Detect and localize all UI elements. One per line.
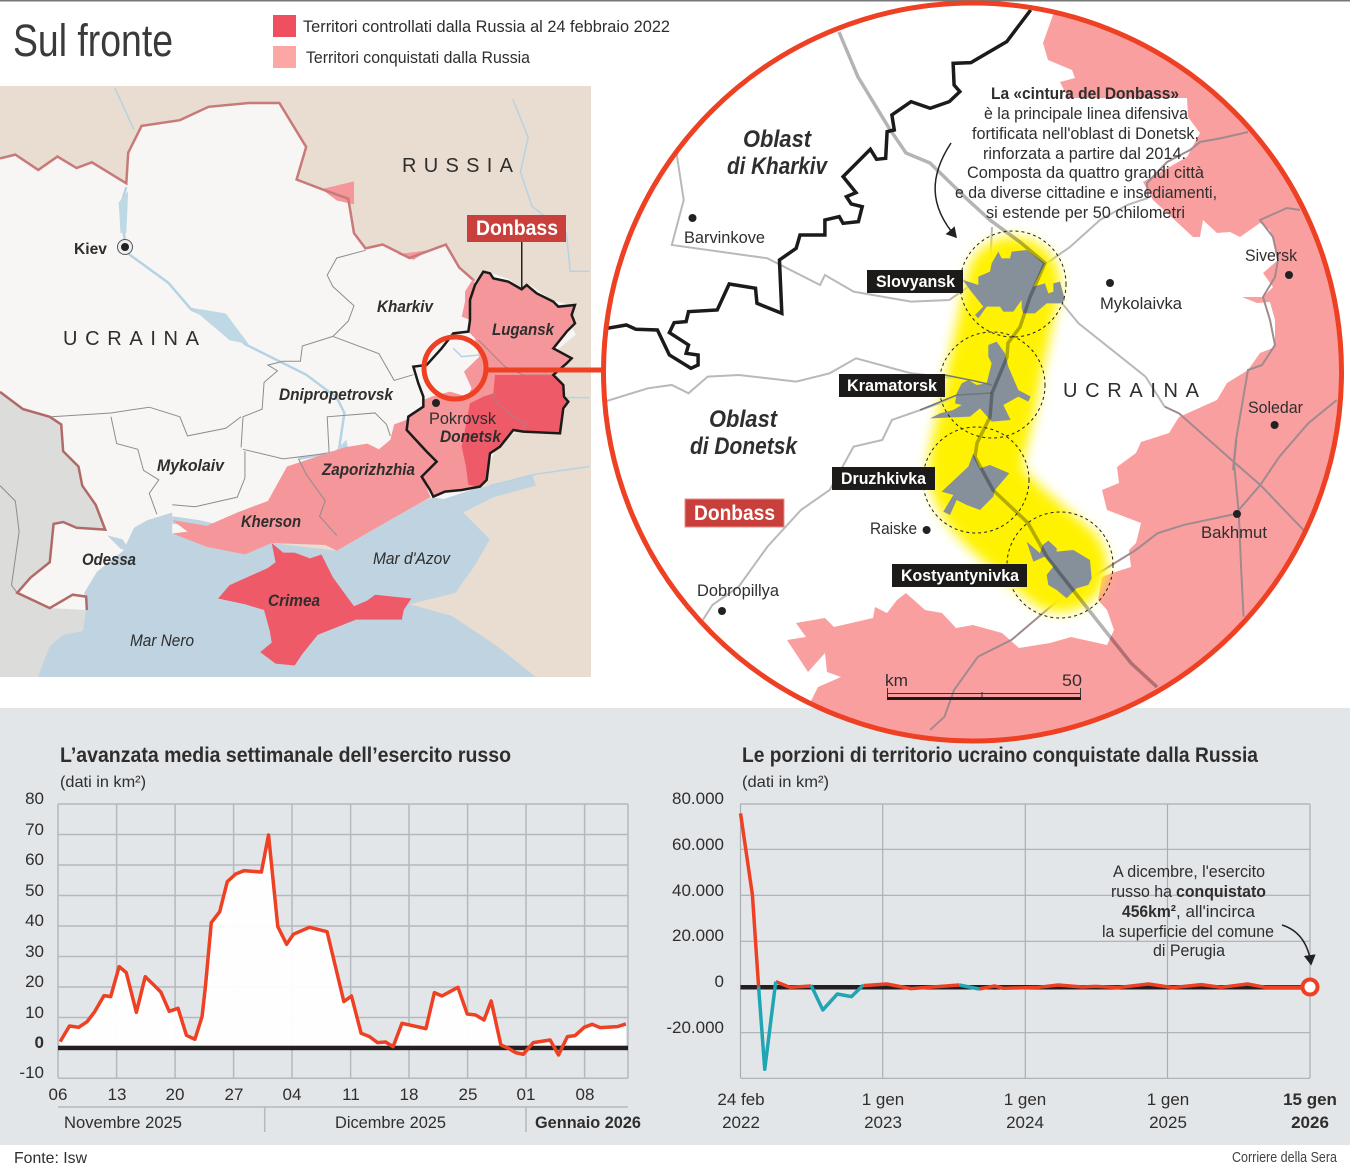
line: losses <box>759 982 979 1069</box>
towns: Mykolaivka <box>1100 294 1183 313</box>
source: Fonte: Isw <box>14 1150 87 1167</box>
labels: regions: Crimea <box>268 591 320 610</box>
patches on the Russian border <box>321 181 429 260</box>
labels: regions: Lugansk <box>492 320 555 339</box>
x axis labels: 27 <box>225 1085 243 1104</box>
label: Ucraina: UCRAINA <box>63 328 200 350</box>
line: km² per week <box>60 835 626 1055</box>
icon: Kiev capital marker <box>118 240 132 254</box>
title: Sul fronte <box>13 15 173 66</box>
thin roads <box>605 132 1337 730</box>
legend: Territori controllati dalla Russia al 24 febbraio 2022 <box>303 17 670 36</box>
x axis labels: 2024 <box>1006 1113 1044 1132</box>
callout: russo ha <box>1111 882 1173 901</box>
y axis labels: 60 <box>25 850 44 869</box>
city labels: Kostyantynivka <box>901 566 1019 585</box>
text block: cintura del Donbass: rinforzata a partire dal 2014. <box>983 144 1186 163</box>
callout: , all'incirca <box>1176 902 1256 921</box>
y axis labels: 0 <box>715 972 724 991</box>
labels: oblasts: di Donetsk <box>690 433 798 460</box>
panel: bottom charts background <box>0 708 1350 1145</box>
labels: regions: Mar Nero <box>130 631 194 650</box>
x axis labels <box>717 1090 1337 1132</box>
label: Russia: RUSSIA <box>402 155 514 177</box>
towns: Raiske <box>870 519 917 538</box>
labels: regions: Mar d'Azov <box>373 549 451 568</box>
x axis labels: 2023 <box>864 1113 902 1132</box>
city labels: Druzhkivka <box>841 469 927 488</box>
callout: conquistato <box>1176 882 1266 901</box>
y axis labels: 20.000 <box>672 926 724 945</box>
heading: right chart: Le porzioni di territorio ucraino conquistate dalla Russia <box>742 744 1258 767</box>
heading: left chart: (dati in km²) <box>60 774 146 791</box>
month labels: Dicembre 2025 <box>335 1113 446 1132</box>
Donbass held before 2022 <box>462 375 568 487</box>
chart: territory conquered <box>666 789 1337 1132</box>
towns: Dobropillya <box>697 581 780 600</box>
y axis labels: 80.000 <box>672 789 724 808</box>
legend: Territori conquistati dalla Russia <box>306 48 531 67</box>
city labels <box>832 270 1027 587</box>
label: Ucraina in zoom: UCRAINA <box>1063 380 1200 402</box>
area: conquered territory <box>787 0 1350 780</box>
territories conquered in the south <box>172 419 436 555</box>
x axis labels: 06 <box>49 1085 67 1104</box>
month labels: Gennaio 2026 <box>535 1113 641 1132</box>
label: Pokrovsk: Pokrovsk <box>429 409 496 428</box>
y axis labels: 70 <box>25 820 44 839</box>
main road <box>839 32 1157 687</box>
text block: cintura del Donbass: fortificata nell'oblast di Donetsk, <box>972 124 1199 143</box>
map: Ukraine overview <box>0 86 591 677</box>
towns: Soledar <box>1248 398 1303 417</box>
y axis labels: 40 <box>25 911 44 930</box>
labels: regions: Kherson <box>241 512 301 531</box>
x axis labels: 1 gen <box>1004 1090 1046 1109</box>
text block: cintura del Donbass: è la principale linea difensiva <box>984 104 1189 123</box>
text block: cintura del Donbass: Composta da quattro grandi città <box>967 163 1205 182</box>
marker: latest value <box>1302 980 1318 994</box>
month labels <box>64 1113 641 1132</box>
labels: oblasts: di Kharkiv <box>727 153 828 180</box>
x axis labels: 1 gen <box>862 1090 904 1109</box>
labels: regions: Mykolaiv <box>157 456 225 475</box>
locator circle and connector <box>424 337 603 399</box>
x axis labels: 11 <box>342 1085 360 1104</box>
callout: di Perugia <box>1153 941 1226 960</box>
city roads <box>920 375 992 410</box>
scale bar <box>885 671 1082 700</box>
towns <box>684 214 1303 615</box>
text block: cintura del Donbass: e da diverse cittadine e insediamenti, <box>955 183 1217 202</box>
month labels: Novembre 2025 <box>64 1113 182 1132</box>
heading: left chart <box>60 744 511 791</box>
callout: A dicembre, l'esercito <box>1113 862 1265 881</box>
legend <box>273 15 670 68</box>
labels: oblasts: Oblast <box>743 126 812 153</box>
text block: cintura del Donbass: La «cintura del Donbass» <box>991 84 1179 103</box>
y axis labels: 50 <box>25 881 44 900</box>
x axis labels <box>49 1085 594 1104</box>
dashed city circles <box>923 231 1113 618</box>
towns: Siversk <box>1245 246 1297 265</box>
x axis labels: 2022 <box>722 1113 760 1132</box>
city labels: Slovyansk <box>876 272 956 291</box>
labels: regions: Zaporizhzhia <box>321 460 415 479</box>
arrow: callout to marker <box>1282 925 1311 964</box>
x axis labels: 18 <box>400 1085 418 1104</box>
chart: weekly average advance <box>19 789 641 1132</box>
line: gains <box>741 813 1310 989</box>
callout <box>1102 862 1274 960</box>
uncaptured pocket <box>415 332 479 400</box>
y axis labels: 30 <box>25 942 44 961</box>
Crimea <box>218 543 411 666</box>
y axis labels <box>19 789 44 1082</box>
y axis labels: -20.000 <box>666 1018 724 1037</box>
y axis labels: 40.000 <box>672 881 724 900</box>
labels: regions <box>82 297 555 650</box>
city labels: Kramatorsk <box>847 376 938 395</box>
x axis labels: 15 gen <box>1283 1090 1337 1109</box>
circle outline <box>604 3 1342 741</box>
highlight: yellow defensive belt <box>976 284 1060 565</box>
y axis labels: -10 <box>19 1063 44 1082</box>
x axis labels: 2026 <box>1291 1113 1329 1132</box>
y axis labels: 0 <box>35 1033 44 1052</box>
heading: left chart: L’avanzata media settimanale dell’esercito russo <box>60 744 511 767</box>
x axis labels: 13 <box>108 1085 126 1104</box>
labels: regions: Odessa <box>82 550 136 569</box>
Kharkiv eastern strip <box>462 278 475 320</box>
x axis labels: 20 <box>166 1085 184 1104</box>
x axis labels: 01 <box>517 1085 535 1104</box>
x axis labels: 04 <box>283 1085 301 1104</box>
oblast border <box>595 10 1031 368</box>
x axis labels: 08 <box>576 1085 594 1104</box>
y axis labels: 20 <box>25 972 44 991</box>
leader line: Donbass <box>521 242 522 290</box>
x axis labels: 24 feb <box>717 1090 765 1109</box>
label: Pokrovsk <box>430 399 496 424</box>
labels: oblasts: Oblast <box>709 406 778 433</box>
y axis labels <box>666 789 724 1037</box>
arrow: to Slovyansk <box>935 143 956 237</box>
x axis labels: 2025 <box>1149 1113 1187 1132</box>
towns: Barvinkove <box>684 228 765 247</box>
text block: cintura del Donbass <box>955 84 1217 222</box>
labels: oblasts <box>690 126 828 460</box>
panel: zoomed map circle <box>595 0 1350 780</box>
label: Donbass tag in zoom: Donbass <box>694 502 775 525</box>
labels: regions: Dnipropetrovsk <box>279 385 394 404</box>
label: Kiev: Kiev <box>74 241 107 258</box>
text block: cintura del Donbass: si estende per 50 chilometri <box>986 203 1185 222</box>
heading: right chart: (dati in km²) <box>742 774 829 791</box>
city areas <box>930 250 1092 598</box>
y axis labels: 80 <box>25 789 44 808</box>
Donbass conquered <box>407 272 575 497</box>
y axis labels: 10 <box>25 1003 44 1022</box>
label: Donbass tag: Donbass <box>476 217 558 240</box>
callout: 456km² <box>1122 902 1176 921</box>
heading: right chart <box>742 744 1258 791</box>
area under line <box>60 835 626 1055</box>
labels: regions: Donetsk <box>440 427 502 446</box>
scale bar: km <box>885 671 908 690</box>
towns: Bakhmut <box>1201 523 1267 542</box>
scale bar: 50 <box>1062 671 1082 690</box>
labels: regions: Kharkiv <box>377 297 434 316</box>
y axis labels: 60.000 <box>672 835 724 854</box>
Donbass outline <box>407 272 575 497</box>
x axis labels: 25 <box>459 1085 477 1104</box>
x axis labels: 1 gen <box>1147 1090 1189 1109</box>
callout: la superficie del comune <box>1102 922 1274 941</box>
